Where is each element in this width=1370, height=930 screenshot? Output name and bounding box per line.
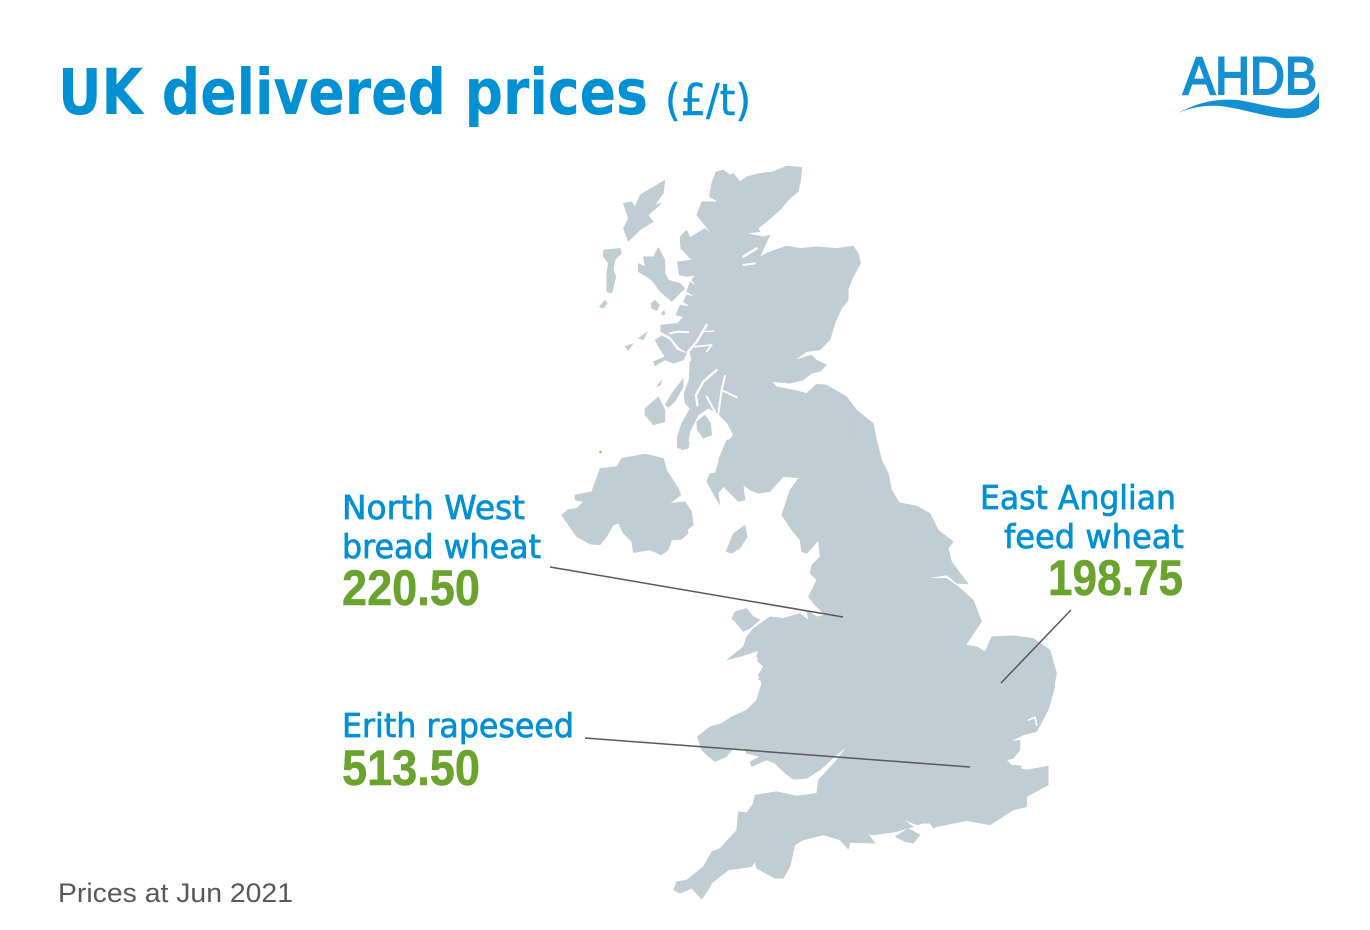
map: eastern England bbox=[840, 440, 1057, 690]
leader line: East Anglia bbox=[1001, 610, 1071, 683]
leader line: North West bbox=[550, 567, 843, 617]
Lewis and Harris bbox=[623, 180, 665, 242]
callout: North West bread wheat: 220.50 bbox=[342, 560, 480, 616]
callout: North West bread wheat: bread wheat bbox=[342, 527, 541, 566]
sea lochs bbox=[670, 248, 757, 413]
Mull bbox=[653, 336, 687, 366]
title: UK delivered prices bbox=[58, 56, 648, 129]
Skye bbox=[638, 247, 685, 302]
callout: East Anglian feed wheat bbox=[980, 478, 1184, 606]
Jura bbox=[665, 378, 683, 407]
footnote: Prices at Jun 2021 bbox=[58, 878, 293, 908]
callout: Erith rapeseed: Erith rapeseed bbox=[342, 706, 574, 745]
callout: Erith rapeseed: 513.50 bbox=[342, 740, 480, 796]
Arran bbox=[697, 415, 712, 438]
map of the UK bbox=[562, 166, 1057, 899]
map: southern England and south Wales bbox=[673, 660, 1055, 899]
callout: East Anglian feed wheat: feed wheat bbox=[1004, 517, 1184, 556]
small green dot bbox=[599, 451, 602, 453]
map: Northern Ireland, northern England and north Wales bbox=[562, 420, 850, 680]
map: Scotland and offshore islands bbox=[599, 166, 880, 460]
callout: Erith rapeseed bbox=[342, 706, 574, 796]
logo: AHDB: AHDB bbox=[1183, 47, 1317, 106]
callout: North West bread wheat: North West bbox=[342, 488, 525, 527]
callout: East Anglian feed wheat: 198.75 bbox=[1048, 550, 1183, 606]
callout: East Anglian feed wheat: East Anglian bbox=[980, 478, 1176, 517]
callout: North West bread wheat bbox=[342, 488, 541, 616]
title: (£/t) bbox=[665, 75, 751, 126]
leader line: Erith bbox=[585, 738, 970, 767]
Islay bbox=[645, 397, 665, 425]
